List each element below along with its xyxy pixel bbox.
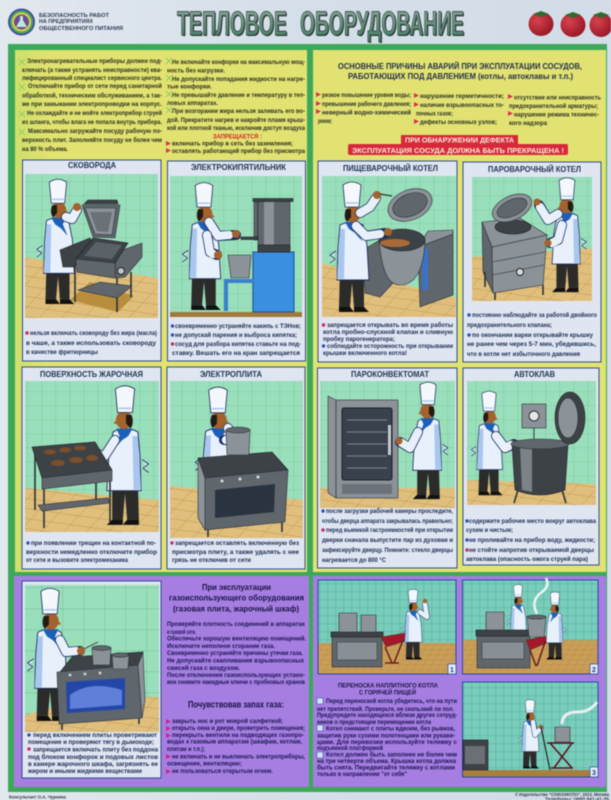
callout: defect warning [348, 135, 568, 155]
heading: electric boiler: ЭЛЕКТРОКИПЯТИЛЬНИК [191, 162, 287, 172]
heading: combi steamer: ПАРОКОНВЕКТОМАТ [351, 369, 430, 379]
text block: carrying instructions: Предупредите находящихся вблизи других сотруд- [317, 711, 457, 719]
text block: general safety rules right column: ность без нагрузки. [167, 66, 225, 74]
panel: combi steamer [318, 368, 457, 568]
panel: steam kettle [463, 162, 601, 362]
caption: electric boiler: не допускай парения и выброса кипятка; [175, 331, 297, 339]
heading: gas equipment: газоиспользующего оборудования [169, 594, 304, 602]
panel: autoclave [463, 368, 599, 565]
text block: gas smell actions [166, 717, 305, 775]
caption: electric stove: грязь не отключив от сети [172, 557, 251, 564]
panel: carrying a stove-top kettle [313, 576, 606, 787]
header logo [8, 8, 35, 36]
caption: griddle: от сети и вызовите электромеханика [26, 557, 128, 564]
caption: steam kettle: предохранительного клапана; [467, 322, 552, 329]
heading: autoclave: АВТОКЛАВ [514, 369, 555, 379]
text block: accident causes lists: почных газов; [416, 110, 453, 118]
caption: griddle: при появлении трещин на контактной по- [31, 539, 156, 547]
header series name: БЕЗОПАСНОСТЬ РАБОТ [39, 13, 110, 19]
text block: general safety rules left column: Максимально загружайте посуду рабочую по- [28, 127, 162, 135]
text block: gas smell actions: водах к газовым аппаратам (шкафам, котлам, [167, 738, 302, 746]
caption: cooking kettle: запрещается открывать во время работы [327, 321, 453, 329]
text block: general safety rules right column: тые конфорки. [167, 84, 212, 90]
text block: general safety rules left column: на 80 % объема. [22, 145, 68, 153]
text block: accident causes lists: неверный водно-химический [322, 108, 411, 116]
caption: electric boiler: ставку. Вешать его на кран запрещается [172, 350, 300, 357]
text block: general safety rules left column: лифицированный специалист сервисного центра. [22, 74, 162, 82]
caption: frying pan: нельзя включать сковороду без жира (масла) [30, 329, 157, 337]
text block: gas smell actions: не пользоваться открытым огнем. [172, 768, 273, 775]
panel: cooking kettle [318, 161, 457, 362]
text block: carrying instructions: цами. Для перевозки используйте тележку с [317, 738, 457, 746]
heading: gas equipment [169, 583, 304, 614]
illustration: chef at autoclave [467, 381, 596, 505]
illustration: chef at tilting frying pan [25, 174, 158, 318]
illustration: chef at electric boiler [170, 176, 302, 317]
panel: frying pan [22, 160, 161, 361]
text block: gas precautions: Не допускайте скапливания взрывоопасных [167, 656, 304, 664]
panel: gas stove card [22, 581, 161, 778]
caption: steam kettle [467, 311, 597, 358]
text block: accident causes lists: превышение рабочего давления; [322, 100, 411, 108]
caption: griddle: верхности немедленно отключите прибор [26, 548, 157, 556]
text block: general safety rules right column: дой. Прекратите нагрев и накройте пламя крыш- [167, 116, 305, 124]
text block: general safety rules right column: ловых аппаратах. [167, 100, 218, 107]
caption: combi steamer: чтобы дверца аппарата закрывалась правильно; [322, 517, 453, 525]
title: ТЕПЛОВОЕ [178, 6, 288, 44]
text block: accident causes lists: нарушение режима техничес- [514, 112, 599, 118]
text block: carrying instructions: защитив руки сухими полотенцами или рукави- [317, 732, 455, 740]
text block: accident causes lists: нарушение герметичности; [420, 93, 504, 100]
text block: general safety rules right column: Не допускайте попадания жидкости на нагре- [172, 75, 305, 83]
text block: accident causes lists: отсутствие или неисправность [514, 94, 601, 102]
text block: accident causes lists: кого надзора [509, 120, 547, 127]
text block: general safety rules right column: кой или плотной тканью, исключив доступ воздуха [167, 124, 305, 132]
text block: carrying instructions: быть снята. Передвигайте тележку с котлами [317, 764, 455, 772]
heading: cooking kettle: ПИЩЕВАРОЧНЫЙ КОТЕЛ [343, 162, 438, 173]
panel: gas equipment [14, 576, 309, 787]
caption: gas stove: перед включением плиты проветривают [33, 732, 157, 739]
text block: accident causes lists: дефекты основных узлов; [420, 119, 497, 126]
caption: electric stove: запрещается оставлять включенную без [175, 539, 299, 547]
text block: gas precautions: смесей газа с воздухом. [167, 664, 240, 672]
text block: general safety rules right column: включать прибор в сеть без заземления; [172, 140, 293, 148]
text block: accident causes lists: резкое повышение уровня воды; [322, 92, 411, 99]
text block: gas precautions: Проверяйте плотность соединений в аппаратах [167, 620, 305, 628]
caption: electric boiler: сосуд для разбора кипятка ставьте на под- [175, 340, 301, 348]
heading: accident causes [338, 60, 582, 81]
text block: gas smell actions: не включать и не выключать электроприборы, [172, 752, 305, 760]
caption: autoclave: сухим и чистым; [466, 527, 513, 534]
panel: left yellow section [15, 50, 307, 572]
text block: carrying instructions: нет препятствий. Проверьте, не скользкий ли пол. [317, 705, 454, 713]
caption: cooking kettle: пробку парогенератора; [323, 335, 395, 343]
caption: frying pan: в качестве фритюрницы [26, 349, 98, 356]
text block: general safety rules left column: верхность плит. Заполняйте посуду не более чем [22, 136, 162, 144]
caption: autoclave: содержите рабочее место вокруг автоклава [469, 517, 596, 525]
text block: general safety rules left column: Электронагревательные приборы должен под- [27, 57, 162, 65]
heading: frying pan: СКОВОРОДА [68, 160, 116, 170]
text block: accident causes lists [316, 92, 601, 127]
title [177, 5, 465, 44]
illustration: step 2 [462, 578, 598, 674]
text block: accident causes lists: режим; [318, 118, 332, 125]
illustration: step 2: 2 [592, 667, 596, 674]
text block: general safety rules right column [166, 58, 305, 155]
text block: carrying instructions: Котел снимают с плиты вдвоем, без рывков, [326, 724, 455, 732]
heading: carrying kettle [338, 682, 438, 696]
text block: accident causes lists: предохранительной арматуры; [509, 102, 598, 110]
caption: electric boiler [171, 322, 301, 357]
text block: gas precautions: После отключения газоиспользующих устано- [167, 672, 305, 679]
caption: steam kettle: по окончании варки открывайте крышку [472, 331, 593, 339]
heading: accident causes: ОСНОВНЫЕ ПРИЧИНЫ АВАРИЙ ПРИ ЭКСПЛУАТАЦИИ СОСУДОВ, [338, 60, 582, 71]
caption: autoclave [465, 517, 596, 563]
text block: gas smell actions: открыть окна и двери, проветрить помещения; [172, 725, 305, 732]
caption: gas stove: помещение и проверяют тягу в дымоходе; [28, 739, 154, 746]
text block: gas precautions: и газовой сети. [167, 628, 196, 636]
illustration: step 1: 1 [450, 667, 454, 674]
text block: general safety rules right column: оставлять работающий прибор без присмотра [172, 147, 305, 155]
panel: electric boiler [168, 161, 306, 361]
text block: gas precautions: Исключите неполное сгорание газа. [167, 643, 275, 650]
caption: autoclave: не стойте напротив открываемой дверцы [469, 546, 594, 554]
caption: frying pan [25, 329, 157, 356]
text block: carrying instructions: Перед переноской котла убедитесь, что на пути [326, 697, 457, 705]
text block: general safety rules left column [19, 57, 162, 153]
caption: steam kettle: что в котле нет избыточного давления [467, 350, 580, 358]
illustration: chef at gas stove [25, 585, 159, 732]
caption: combi steamer [321, 507, 453, 564]
caption: gas stove: в камере жарочного шкафа, загрязнять ее [28, 761, 158, 768]
caption: steam kettle: не ранее чем через 5-7 мин, убедившись, [467, 340, 596, 348]
header series name [39, 13, 123, 32]
text block: gas smell actions: закрыть нос и рот мокрой салфеткой; [172, 717, 283, 725]
text block: general safety rules left column: из шланга, чтобы влага не попала внутрь прибора. [22, 118, 162, 126]
caption: cooking kettle [322, 321, 454, 357]
text block: carrying instructions: на три четверти объема. Крышка котла должна [317, 757, 456, 765]
caption: electric boiler: своевременно устраняйте накипь с ТЭНов; [175, 322, 301, 330]
caption: combi steamer: дверки сначала выпустите пар из духовки и [322, 537, 453, 544]
illustration: chef at combi steamer [320, 381, 455, 508]
panel: right yellow section [313, 50, 606, 572]
text block: gas precautions: вок снимите накидные ключи с пробковых кранов [167, 678, 305, 686]
header series name: НА ПРЕДПРИЯТИЯХ [39, 19, 93, 25]
illustration: chef at griddle [25, 381, 159, 532]
text block: general safety rules left column: Не охлаждайте и не мойте электроприбор струей [27, 109, 162, 117]
heading: griddle: ПОВЕРХНОСТЬ ЖАРОЧНАЯ [40, 369, 143, 379]
text block: gas precautions [167, 620, 306, 686]
text block: gas smell actions: плитам и т.п.); [167, 746, 205, 753]
heading: carrying kettle: С ГОРЯЧЕЙ ПИЩЕЙ [359, 688, 416, 696]
title: ТЕПЛОВОЕ [177, 5, 287, 43]
text block: gas precautions: Своевременно устраняйте причины утечки газа. [167, 649, 303, 657]
caption: frying pan: в чаше, а также использовать сковороду [26, 340, 157, 347]
heading: gas equipment: (газовая плита, жарочный шкаф) [173, 604, 299, 614]
heading: accident causes: РАБОТАЮЩИХ ПОД ДАВЛЕНИЕМ (котлы, автоклавы и т.п.) [348, 71, 573, 81]
text block: general safety rules left column: обработкой, техническим обслуживанием, а так- [22, 92, 162, 100]
illustration: step 1 [318, 580, 456, 674]
caption: griddle [26, 539, 157, 564]
caption: electric stove: присмотра плиту, а также удалять с нее [172, 549, 299, 556]
footer publisher [515, 791, 609, 800]
caption: electric stove [170, 539, 299, 564]
title: ОБОРУДОВАНИЕ [301, 6, 465, 44]
caption: steam kettle: постоянно наблюдайте за работой двойного [472, 311, 597, 319]
heading: carrying kettle: ПЕРЕНОСКА НАПЛИТНОГО КОТЛА [338, 682, 438, 690]
text block: general safety rules left column: же при замыкании электропроводки на корпус. [21, 101, 162, 108]
caption: gas stove [27, 732, 158, 775]
title: ОБОРУДОВАНИЕ [300, 5, 464, 43]
caption: combi steamer: нагревается до 800 °C [322, 556, 386, 564]
caption: combi steamer: перед выемкой гастроемкостей при открытии [326, 526, 453, 534]
caption: autoclave: автоклава (опасность ожога струей пара) [466, 555, 588, 563]
text block: carrying instructions [317, 697, 457, 778]
text block: gas precautions: Обеспечьте хорошую вентиляцию помещений. [167, 634, 306, 642]
illustration: step 3 [462, 682, 598, 777]
text block: gas smell actions: перекрыть вентили на подводящих газопро- [172, 732, 304, 739]
callout: defect warning: ЭКСПЛУАТАЦИЯ СОСУДА ДОЛЖНА БЫТЬ ПРЕКРАЩЕНА ! [352, 146, 564, 155]
illustration: chef at cooking kettle [322, 176, 456, 317]
text block: general safety rules right column: При возгорании жира нельзя заливать его во- [172, 108, 305, 115]
caption: autoclave: не проливайте на прибор воду, жидкости; [469, 536, 595, 544]
text block: general safety rules left column: Отключайте прибор от сети перед санитарной [28, 82, 162, 90]
heading: steam kettle: ПАРОВАРОЧНЫЙ КОТЕЛ [488, 163, 581, 174]
illustration: step 3: 3 [592, 770, 596, 777]
caption: combi steamer: зафиксируйте дверцу. Помните: стекло дверцы [322, 546, 453, 554]
text block: carrying instructions: только в направлении "от себя" [317, 770, 407, 778]
text block: carrying instructions: ников о предстоящем перемещении котла [317, 719, 431, 726]
text block: general safety rules left column: ключать (а также устранять неисправности) ква- [22, 67, 162, 74]
heading: gas equipment: При эксплуатации [202, 583, 271, 592]
panel: griddle [22, 367, 161, 569]
illustration: chef at steam kettle [472, 177, 592, 301]
header series name: ОБЩЕСТВЕННОГО ПИТАНИЯ [39, 26, 123, 32]
caption: cooking kettle: котла пробно-спускной клапан и сливную [323, 328, 454, 336]
caption: gas stove: под блоком конфорок и подовых листов [28, 753, 158, 761]
text block: accident causes lists: наличие взрывоопасных то- [420, 102, 504, 109]
text block: general safety rules right column: ЗАПРЕЩАЕТСЯ : [213, 134, 262, 140]
text block: carrying instructions: подъемной платформой [317, 744, 383, 752]
caption: cooking kettle: соблюдайте осторожность при открывании [327, 342, 453, 350]
caption: gas stove: запрещается включать плиту без поддона [33, 746, 158, 754]
text block: carrying instructions: Котел должен быть заполнен не более чем [326, 750, 457, 758]
text block: general safety rules right column: Не включайте конфорки на максимальную мощ- [172, 58, 305, 66]
text block: general safety rules right column: Не превышайте давление и температуру в теп- [172, 91, 305, 99]
caption: cooking kettle: крышки включенного котла! [323, 350, 407, 357]
text block: gas smell actions: освещение, вентиляцию; [167, 760, 242, 768]
icon: tomatoes [528, 11, 611, 37]
callout: defect warning: ПРИ ОБНАРУЖЕНИИ ДЕФЕКТА [405, 136, 514, 144]
illustration: chef at electric stove [170, 381, 303, 538]
panel: electric stove [167, 367, 305, 569]
heading: smell of gas: Почувствовав запах газа: [188, 700, 284, 710]
caption: gas stove: жиром и иными жидкими веществами [27, 768, 142, 775]
heading: electric stove: ЭЛЕКТРОПЛИТА [200, 369, 262, 379]
caption: combi steamer: после загрузки рабочей камеры проследите, [326, 507, 453, 515]
